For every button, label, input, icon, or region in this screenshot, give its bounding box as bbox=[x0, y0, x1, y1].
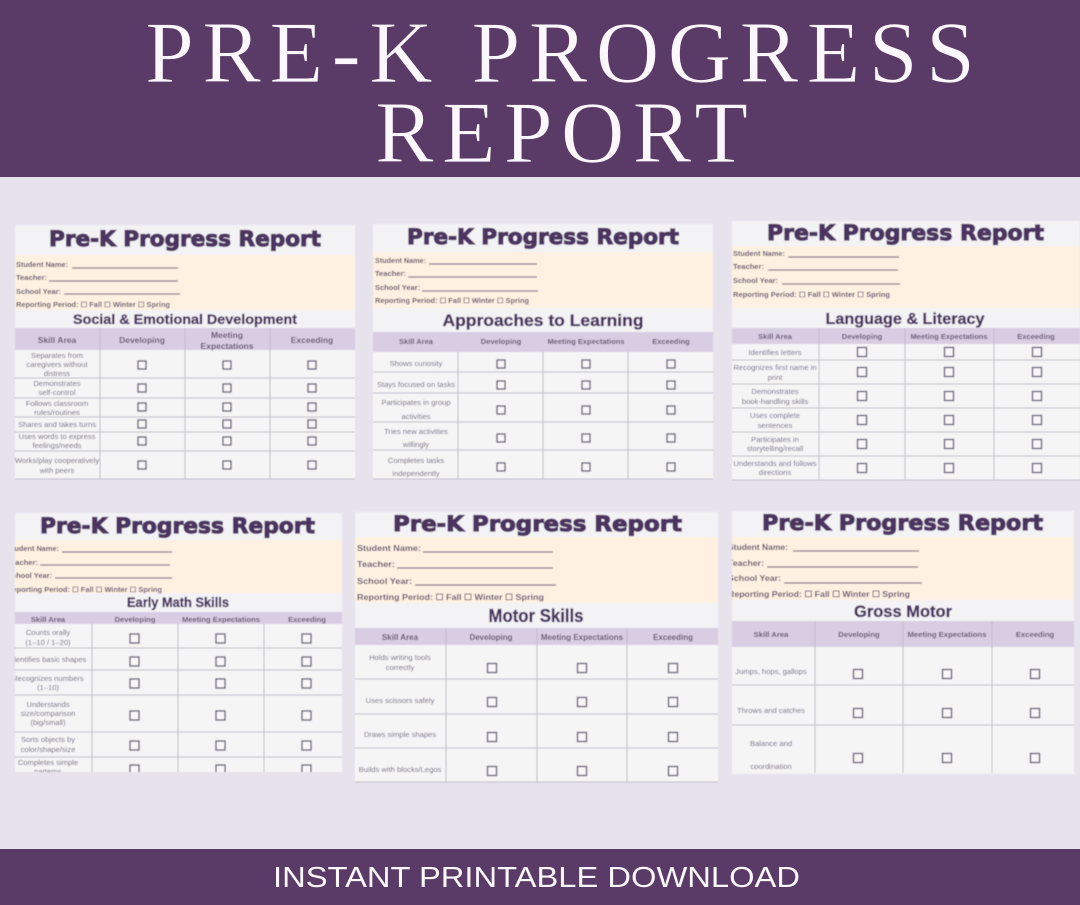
skills table: Uses complete bbox=[750, 411, 800, 420]
skills table: Identifies letters bbox=[748, 348, 802, 357]
student fields bbox=[733, 251, 900, 299]
skills table: (1–10 / 1–20) bbox=[25, 638, 71, 647]
skills table bbox=[732, 328, 1080, 480]
student fields: Student Name: bbox=[7, 546, 59, 553]
skills table: Exceeding bbox=[653, 633, 693, 642]
skills table: independently bbox=[392, 469, 440, 478]
skills table: Understands and follows bbox=[733, 459, 817, 468]
skills table: Skill Area bbox=[399, 337, 434, 346]
skills table: Demonstrates bbox=[33, 379, 81, 388]
skills table: Counts orally bbox=[26, 628, 70, 637]
skills table: Meeting Expectations bbox=[182, 615, 260, 624]
skills table: Skill Area bbox=[38, 335, 76, 345]
skills table: Meeting Expectations bbox=[547, 337, 625, 346]
skills table: Tries new activities bbox=[384, 427, 448, 436]
student fields bbox=[16, 262, 180, 309]
skills table: activities bbox=[401, 412, 431, 421]
skills table: Developing bbox=[115, 615, 156, 624]
skills table: Shows curiosity bbox=[390, 359, 443, 368]
panel: Language & Literacy bbox=[732, 221, 1080, 480]
skills table: (big/small) bbox=[30, 718, 66, 727]
skills table: correctly bbox=[386, 663, 415, 672]
student fields: Teacher: bbox=[733, 264, 764, 271]
footer banner bbox=[0, 849, 1080, 905]
skills table: Developing bbox=[119, 335, 165, 345]
student fields: School Year: bbox=[728, 573, 781, 583]
report title: Pre-K Progress Report bbox=[393, 512, 682, 536]
skills table: Skill Area bbox=[382, 633, 419, 642]
skills table: Skill Area bbox=[758, 332, 793, 341]
skills table: Identifies basic shapes bbox=[10, 655, 87, 664]
student fields: Student Name: bbox=[357, 543, 421, 553]
student fields: Reporting Period: ☐ Fall ☐ Winter ☐ Spring bbox=[7, 586, 162, 594]
section heading: Social & Emotional Development bbox=[73, 311, 297, 327]
skills table: Developing bbox=[838, 630, 880, 639]
student fields: Student Name: bbox=[375, 258, 426, 265]
skills table: distress bbox=[44, 369, 70, 378]
skills table: Uses words to express bbox=[19, 432, 96, 441]
report title: Pre-K Progress Report bbox=[767, 221, 1044, 245]
section heading: Language & Literacy bbox=[826, 311, 985, 328]
skills table: willingly bbox=[402, 440, 429, 449]
panel: Social & Emotional Development bbox=[15, 225, 355, 479]
section heading: Approaches to Learning bbox=[442, 311, 644, 330]
skills table: Skill Area bbox=[31, 615, 66, 624]
student fields: Student Name: bbox=[16, 262, 68, 269]
student fields: Reporting Period: ☐ Fall ☐ Winter ☐ Spring bbox=[375, 297, 529, 305]
skills table: Draws simple shapes bbox=[364, 730, 436, 739]
student fields bbox=[357, 543, 556, 602]
skills table: with peers bbox=[39, 466, 75, 475]
skills table: Throws and catches bbox=[737, 706, 805, 715]
student fields: School Year: bbox=[375, 285, 420, 292]
skills table: Developing bbox=[469, 633, 513, 642]
skills table: rules/routines bbox=[34, 408, 80, 417]
section heading: Motor Skills bbox=[488, 606, 584, 626]
skills table bbox=[373, 332, 713, 479]
panel: Approaches to Learning bbox=[373, 224, 713, 479]
title bbox=[145, 5, 975, 182]
skills table: Expectations bbox=[201, 341, 254, 351]
skills table: Builds with blocks/Legos bbox=[359, 765, 442, 774]
skills table: sentences bbox=[758, 421, 793, 430]
skills table: coordination bbox=[750, 762, 792, 771]
title: PRE-K PROGRESS bbox=[145, 5, 975, 102]
skills table: Holds writing tools bbox=[369, 653, 431, 662]
student fields: Teacher: bbox=[728, 558, 764, 568]
skills table: Balance and bbox=[750, 739, 792, 748]
skills table: Exceeding bbox=[1017, 332, 1055, 341]
skills table: feelings/needs bbox=[33, 441, 82, 450]
skills table: Jumps, hops, gallops bbox=[735, 667, 807, 676]
skills table: Stays focused on tasks bbox=[377, 380, 455, 389]
header banner bbox=[0, 0, 1080, 182]
skills table: Understands bbox=[26, 700, 70, 709]
student fields: Reporting Period: ☐ Fall ☐ Winter ☐ Spring bbox=[728, 589, 910, 599]
skills table: Exceeding bbox=[652, 337, 690, 346]
student fields: School Year: bbox=[16, 289, 61, 296]
skills table: directions bbox=[759, 468, 791, 477]
student fields: Reporting Period: ☐ Fall ☐ Winter ☐ Spring bbox=[357, 592, 544, 602]
student fields: Teacher: bbox=[16, 275, 47, 282]
skills table: Meeting Expectations bbox=[910, 332, 988, 341]
section heading: Gross Motor bbox=[854, 602, 952, 621]
student fields: School Year: bbox=[7, 573, 52, 580]
student fields bbox=[7, 546, 172, 594]
student fields: Student Name: bbox=[733, 251, 785, 258]
footer text: INSTANT PRINTABLE DOWNLOAD bbox=[273, 862, 800, 894]
skills table: (1–10) bbox=[37, 683, 59, 692]
panel: Motor Skills bbox=[355, 512, 718, 782]
panel: Gross Motor bbox=[728, 511, 1074, 774]
student fields: Reporting Period: ☐ Fall ☐ Winter ☐ Spring bbox=[16, 301, 170, 309]
skills table: Completes tasks bbox=[388, 456, 444, 465]
skills table: Shares and takes turns bbox=[18, 420, 96, 429]
skills table: print bbox=[768, 373, 783, 382]
skills table: Meeting Expectations bbox=[541, 633, 624, 642]
skills table: Uses scissors safely bbox=[366, 696, 435, 705]
skills table: size/comparison bbox=[21, 709, 75, 718]
skills table: Works/play cooperatively bbox=[15, 456, 99, 465]
skills table: Recognizes numbers bbox=[12, 674, 84, 683]
student fields: School Year: bbox=[733, 278, 778, 285]
skills table: Participates in bbox=[751, 435, 799, 444]
skills table bbox=[355, 628, 718, 782]
skills table: Recognizes first name in bbox=[733, 363, 817, 372]
skills table: book-handling skills bbox=[742, 397, 808, 406]
report title: Pre-K Progress Report bbox=[49, 227, 321, 251]
skills table: Exceeding bbox=[1016, 630, 1055, 639]
skills table bbox=[732, 621, 1074, 773]
skills table bbox=[10, 612, 342, 776]
section heading: Early Math Skills bbox=[127, 594, 229, 610]
skills table bbox=[15, 328, 355, 479]
skills table: Developing bbox=[481, 337, 522, 346]
skills table: Meeting Expectations bbox=[907, 630, 987, 639]
report title: Pre-K Progress Report bbox=[407, 225, 679, 249]
student fields: Reporting Period: ☐ Fall ☐ Winter ☐ Spring bbox=[733, 291, 890, 299]
skills table: Skill Area bbox=[754, 630, 789, 639]
student fields: Teacher: bbox=[357, 559, 395, 569]
title: REPORT bbox=[375, 85, 748, 182]
report title: Pre-K Progress Report bbox=[40, 514, 315, 538]
skills table: patterns bbox=[34, 767, 62, 776]
report title: Pre-K Progress Report bbox=[762, 511, 1043, 535]
skills table: Developing bbox=[842, 332, 883, 341]
student fields bbox=[728, 542, 922, 599]
skills table: Completes simple bbox=[18, 758, 78, 767]
student fields: Teacher: bbox=[7, 560, 38, 567]
student fields: Student Name: bbox=[728, 542, 788, 552]
skills table: Follows classroom bbox=[26, 399, 88, 408]
skills table: Demonstrates bbox=[751, 387, 799, 396]
skills table: self-control bbox=[38, 388, 76, 397]
skills table: Participates in group bbox=[381, 398, 451, 407]
skills table: Sorts objects by bbox=[21, 735, 75, 744]
skills table: Meeting bbox=[211, 330, 243, 340]
skills table: storytelling/recall bbox=[747, 444, 804, 453]
skills table: color/shape/size bbox=[21, 745, 75, 754]
skills table: Exceeding bbox=[291, 335, 333, 345]
student fields bbox=[375, 258, 538, 305]
skills table: Exceeding bbox=[288, 615, 326, 624]
student fields: Teacher: bbox=[375, 271, 406, 278]
skills table: Separates from bbox=[31, 351, 83, 360]
student fields: School Year: bbox=[357, 576, 412, 586]
skills table: caregivers without bbox=[26, 360, 88, 369]
panel: Early Math Skills bbox=[7, 513, 342, 776]
